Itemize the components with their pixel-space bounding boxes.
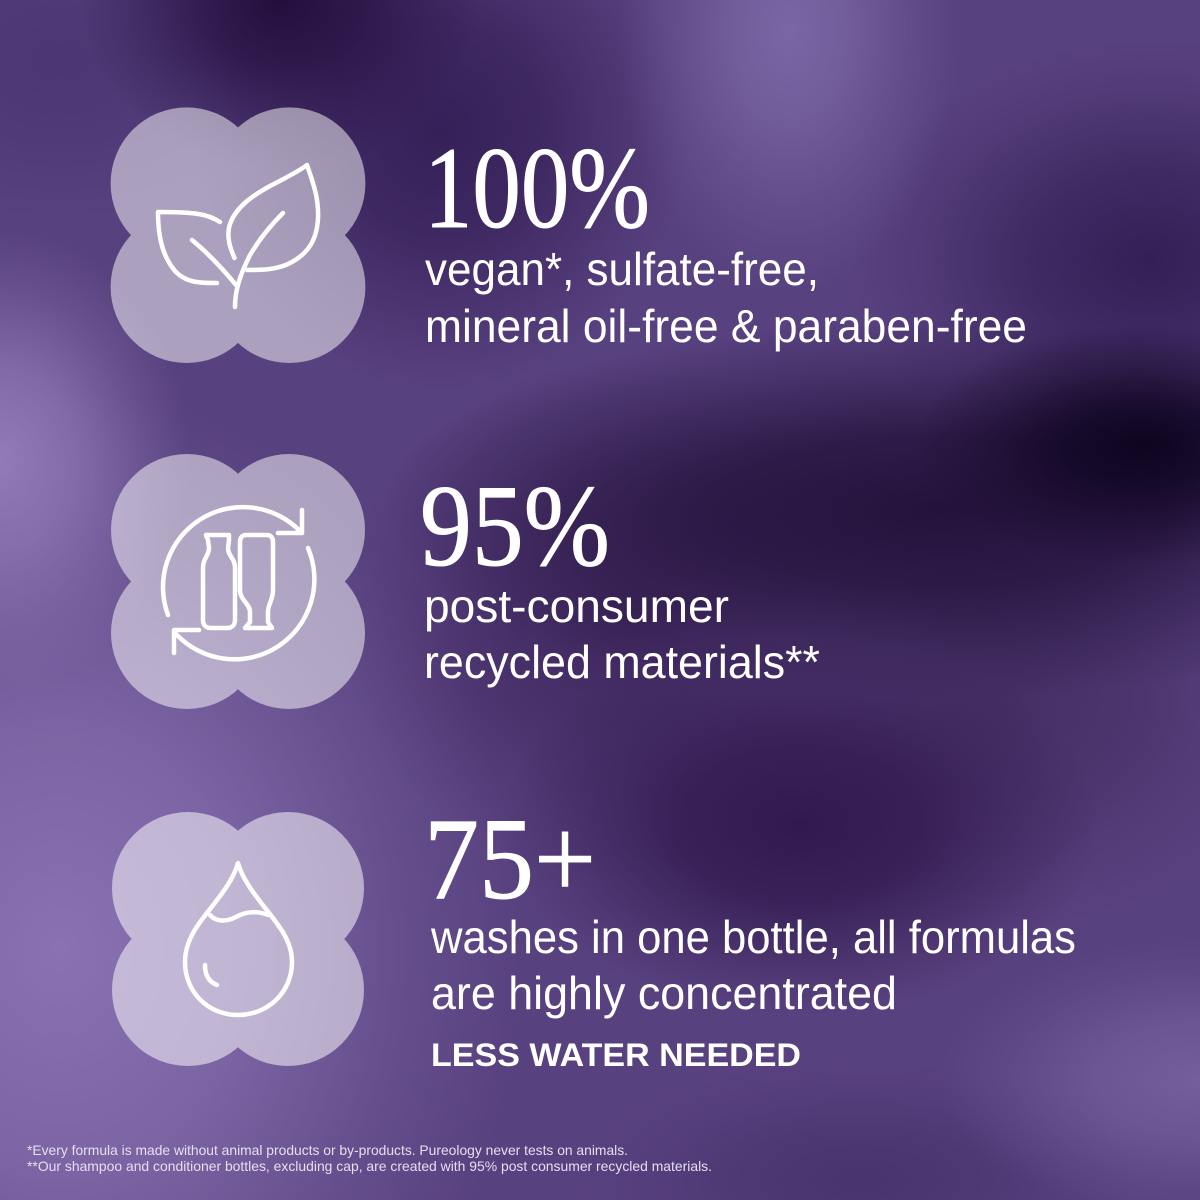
icon: water drop	[185, 863, 292, 1015]
footnotes: **Our shampoo and conditioner bottles, excluding cap, are created with 95% post consumer recycled materials.	[27, 1158, 712, 1174]
text: recycled materials: post-consumer	[424, 580, 729, 632]
text: recycled materials: recycled materials**	[424, 636, 820, 688]
text: washes claim: are highly concentrated	[431, 967, 897, 1019]
callout: less water needed: LESS WATER NEEDED	[431, 1037, 801, 1073]
footnotes: *Every formula is made without animal products or by-products. Pureology never tests on animals.	[27, 1142, 628, 1158]
heading: 75+: 75+	[424, 795, 596, 924]
icon panel: leaf badge	[111, 107, 365, 363]
icon panel: recycled bottles badge	[111, 454, 365, 709]
text: washes claim: washes in one bottle, all formulas	[430, 911, 1076, 963]
heading: 95%: 95%	[420, 462, 610, 591]
icon: leaves	[158, 165, 318, 307]
clover shape	[111, 107, 365, 363]
clover shape	[111, 454, 365, 709]
heading: 100%: 100%	[424, 124, 650, 253]
footnotes	[27, 1142, 712, 1174]
text: vegan claims	[425, 243, 1027, 352]
text: vegan claims: vegan*, sulfate-free,	[425, 243, 819, 295]
clover shape	[112, 812, 364, 1066]
icon: recycling arrows and bottles	[163, 507, 314, 659]
text: recycled materials	[424, 580, 820, 688]
text: washes claim	[430, 911, 1076, 1019]
text: vegan claims: mineral oil-free & paraben-free	[425, 300, 1027, 352]
icon panel: water drop badge	[112, 812, 364, 1066]
